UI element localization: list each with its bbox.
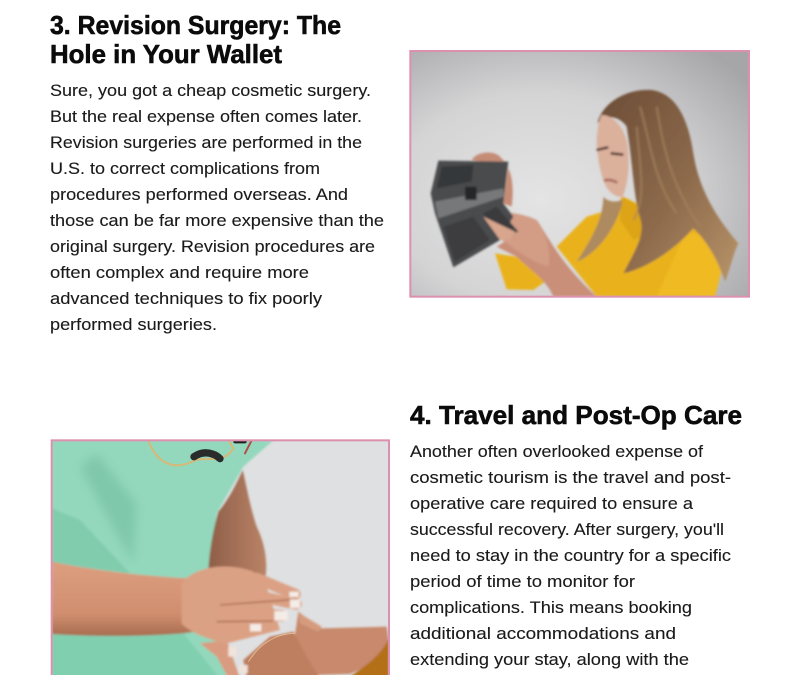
bracelet [248,633,295,662]
heading: travel and post-op care: 4. Travel and Post-Op Care [410,400,742,430]
body text: travel and post-op care: Another often overlooked expense of [410,442,703,461]
heading: revision surgery: Hole in Your Wallet [50,39,282,69]
body text: travel and post-op care: need to stay in the country for a specific [410,546,731,565]
upper hand behind wallet [472,153,513,207]
body text: travel and post-op care: cosmetic tourism is the travel and post- [410,468,731,487]
photo border [410,51,749,297]
section 4: travel and post-op care text [410,400,742,669]
section 3: revision surgery text [50,10,384,334]
body text: travel and post-op care: extending your stay, along with the [410,650,689,669]
body text: travel and post-op care: complications. This means booking [410,598,692,617]
body text: revision surgery: Sure, you got a cheap cosmetic surgery. [50,81,371,100]
nurse forearm [52,562,207,636]
heading: revision surgery [50,10,341,69]
body text: revision surgery [50,81,384,334]
body text: revision surgery: Revision surgeries are performed in the [50,133,362,152]
body text: revision surgery: often complex and require more [50,263,309,282]
wallet [431,161,513,267]
green scrubs [52,440,273,675]
nurse fingers [254,572,303,622]
body text: revision surgery: procedures performed overseas. And [50,185,348,204]
yellow sweater [556,196,701,296]
photo: nurse holding a patient's hand [52,440,389,675]
body text: travel and post-op care: operative care required to ensure a [410,494,694,513]
heading: revision surgery: 3. Revision Surgery: The [50,10,341,40]
forearm and lower hand [496,228,596,296]
body text: revision surgery: But the real expense often comes later. [50,107,362,126]
nurse hand [182,567,280,643]
mustard sleeve [348,638,389,675]
body text: revision surgery: advanced techniques to fix poorly [50,289,323,308]
body text: revision surgery: original surgery. Revision procedures are [50,237,375,256]
nurse upper arm [208,470,266,580]
body text: travel and post-op care: additional accommodations and [410,624,676,643]
body text: revision surgery: performed surgeries. [50,315,217,334]
body text: travel and post-op care [410,442,731,669]
patient arm [293,612,389,675]
long hair [597,90,738,282]
body text: revision surgery: U.S. to correct complications from [50,159,320,178]
body text: travel and post-op care: period of time to monitor for [410,572,635,591]
photo border [52,440,389,675]
face [597,115,629,197]
body text: travel and post-op care: successful recovery. After surgery, you'll [410,520,724,539]
stethoscope [148,440,252,465]
body text: revision surgery: those can be far more expensive than the [50,211,384,230]
photo: woman frowning at an empty wallet [410,51,749,297]
